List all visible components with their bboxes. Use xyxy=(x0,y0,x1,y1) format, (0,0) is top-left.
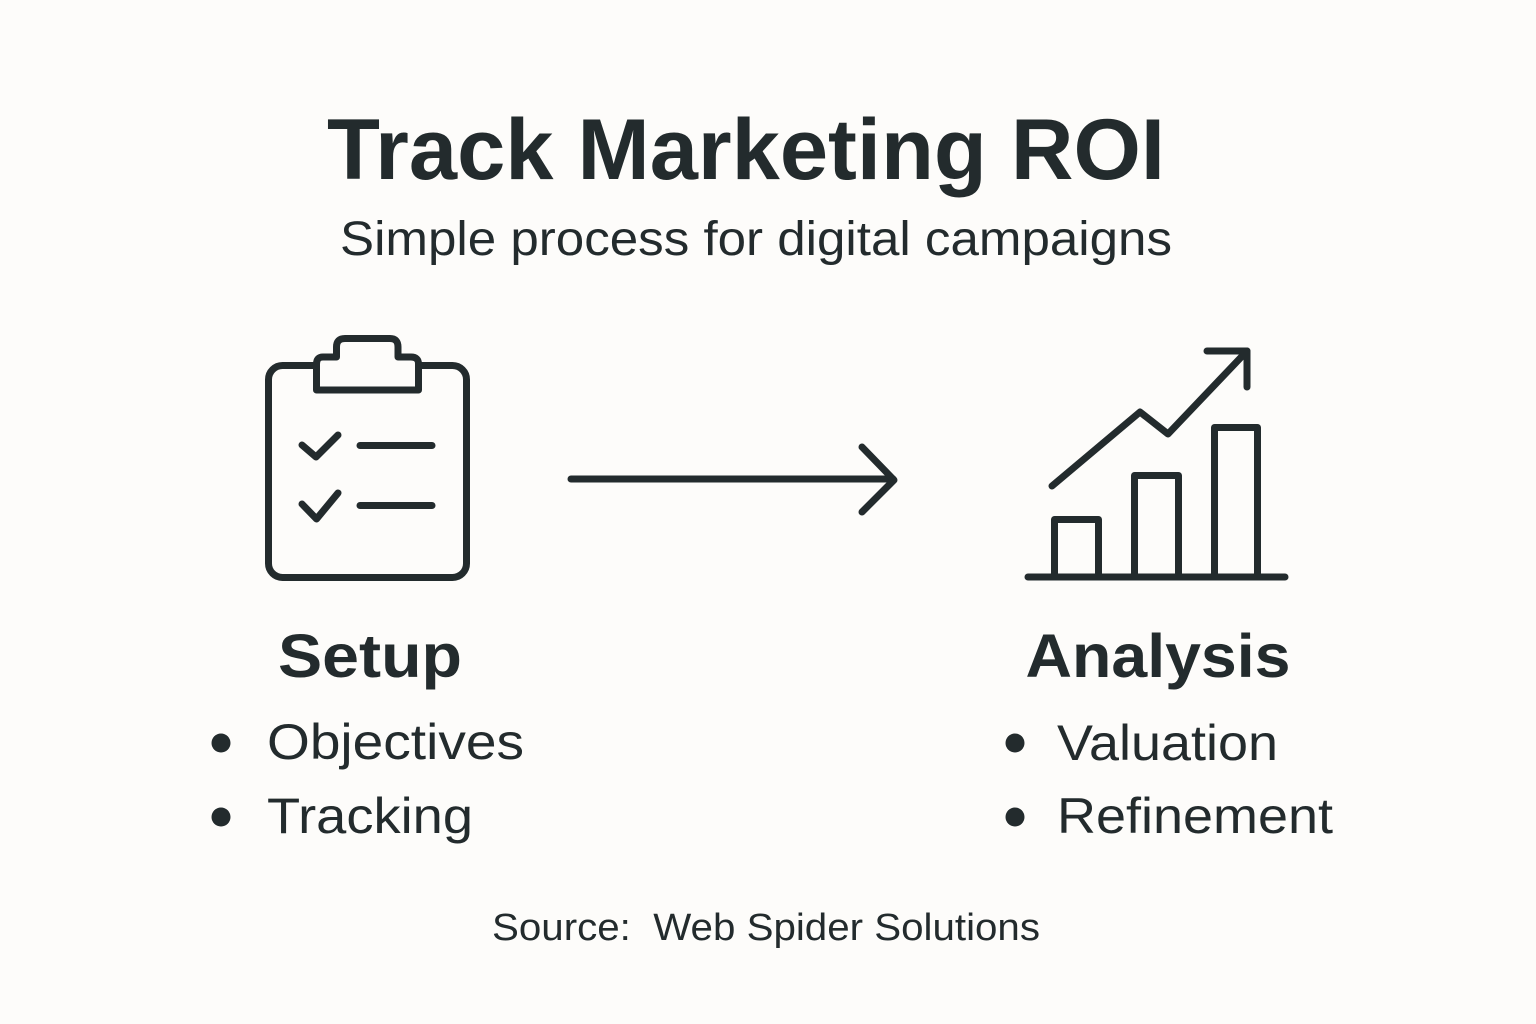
heading: analysis: Analysis xyxy=(1026,622,1290,690)
subtitle: Simple process for digital campaigns xyxy=(340,213,1172,266)
list: analysis items: Valuation xyxy=(1057,715,1278,771)
icon: growth bar chart xyxy=(1028,351,1285,577)
heading: setup: Setup xyxy=(278,622,462,690)
arrow: setup to analysis xyxy=(571,447,894,512)
list: setup items xyxy=(212,714,524,844)
list: setup items: Tracking xyxy=(267,788,473,844)
list: analysis items: Refinement xyxy=(1057,788,1333,844)
list: analysis items xyxy=(1006,715,1333,844)
title: Track Marketing ROI xyxy=(327,102,1165,198)
icon: clipboard checklist xyxy=(268,338,466,578)
source note: Source: Web Spider Solutions xyxy=(492,907,1040,949)
list: setup items: Objectives xyxy=(267,714,524,770)
